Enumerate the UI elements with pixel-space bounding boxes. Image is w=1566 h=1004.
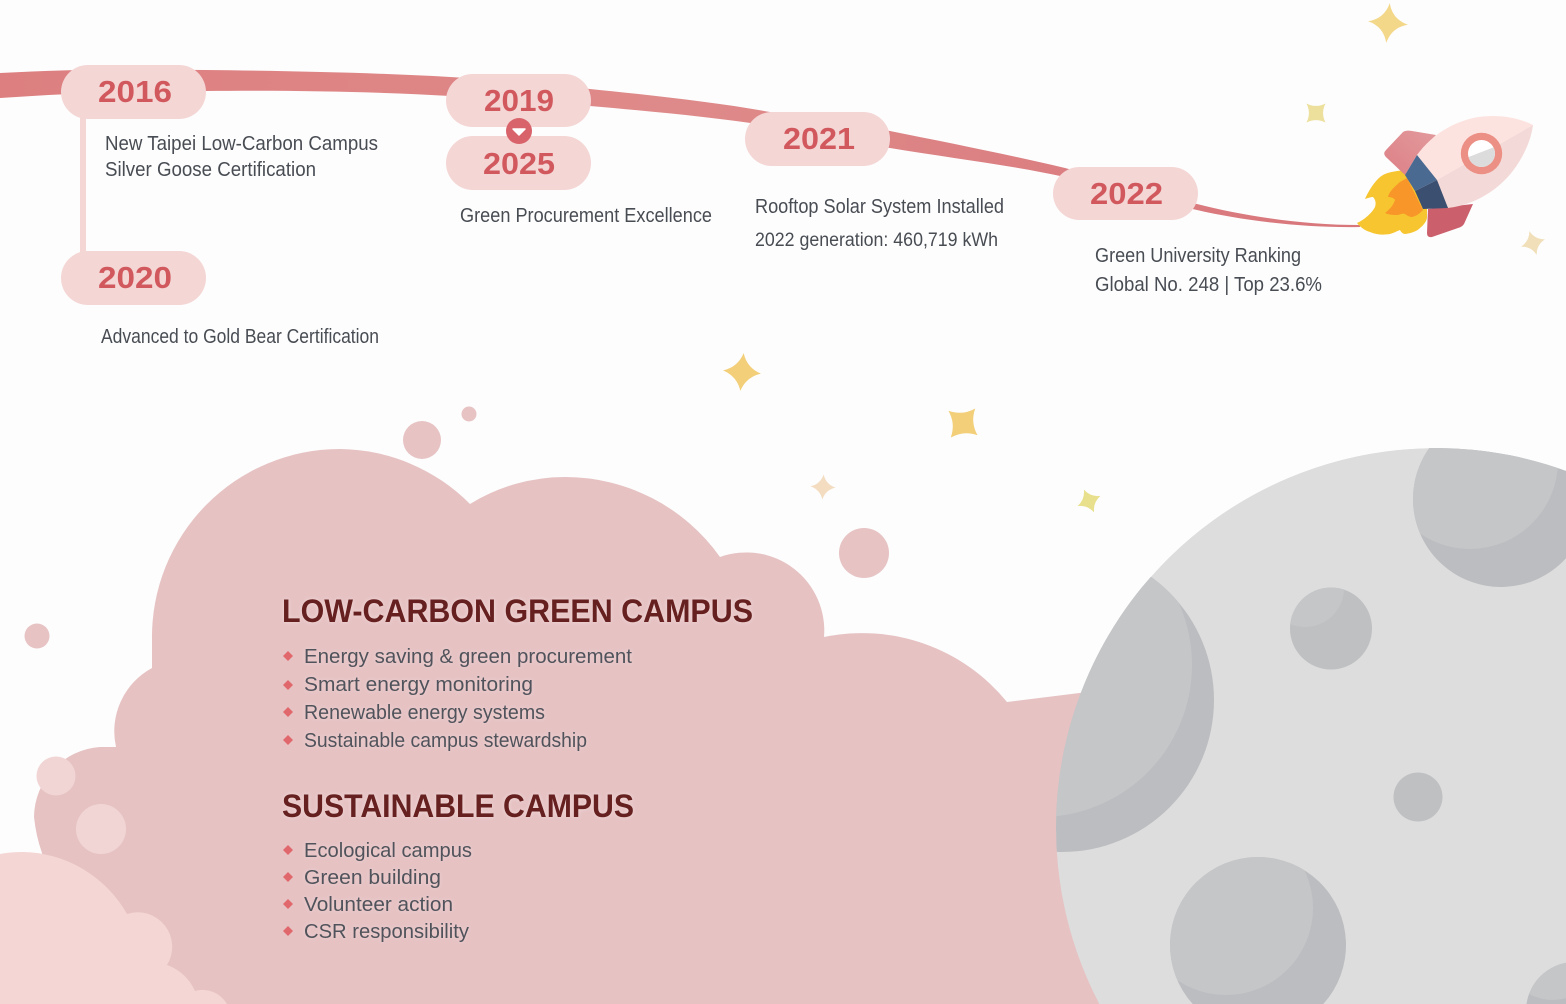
rocket band upper	[1405, 155, 1437, 191]
bubbles above cloud	[24, 406, 889, 648]
text: 2022 description	[1095, 245, 1322, 296]
rocket window	[1461, 133, 1502, 175]
moon with craters	[1056, 448, 1566, 1004]
rocket body lower	[1430, 125, 1533, 208]
crater: large left	[1056, 576, 1214, 852]
list: low-carbon items: Energy saving & green procurement	[304, 645, 632, 668]
milestone: 2025: 2025	[483, 146, 555, 181]
milestone: 2022: 2022	[1090, 176, 1163, 211]
rocket flame inner	[1385, 178, 1423, 217]
star: center	[721, 351, 763, 393]
milestone: 2020: 2020	[98, 260, 172, 295]
crater: small	[1394, 772, 1442, 822]
main pink cloud	[34, 449, 1200, 1004]
star: center right	[936, 396, 990, 450]
star: below rocket	[1517, 227, 1549, 259]
text: 2021 description: 2022 generation: 460,719 kWh	[755, 230, 998, 251]
rocket upper fin	[1384, 131, 1436, 175]
text: 2016 description	[105, 133, 378, 181]
milestone: 2025	[446, 136, 591, 190]
text: 2022 description: Green University Ranking	[1095, 245, 1301, 267]
icon: chevron connector	[506, 118, 532, 144]
crater: middle	[1290, 588, 1372, 670]
list: sustainable items	[283, 839, 472, 943]
list: sustainable items: Ecological campus	[304, 839, 472, 862]
crater: top right	[1413, 448, 1566, 587]
milestone: 2021: 2021	[783, 121, 855, 156]
star: small by rocket	[1297, 94, 1335, 132]
pale foreground cloud	[0, 852, 227, 1004]
list: sustainable items: Volunteer action	[304, 893, 453, 916]
milestone: 2021	[745, 112, 890, 166]
icon: rocket	[1357, 116, 1533, 237]
connector line 2016 to 2020	[80, 115, 86, 253]
text: 2022 description: Global No. 248 | Top 23.6%	[1095, 274, 1322, 296]
rocket band lower	[1415, 180, 1448, 209]
star: small center	[810, 474, 836, 500]
milestone: 2016	[61, 65, 206, 119]
text: 2019-2025 description: Green Procurement Excellence	[460, 205, 712, 227]
text: 2016 description: Silver Goose Certification	[105, 159, 316, 181]
list: sustainable items: Green building	[304, 866, 441, 889]
rocket flame outer	[1357, 170, 1427, 235]
milestone: 2019	[446, 74, 591, 127]
milestone: 2016: 2016	[98, 74, 172, 109]
list: low-carbon items: Smart energy monitoring	[304, 673, 533, 696]
milestone: 2020	[61, 251, 206, 305]
timeline ribbon	[0, 69, 1360, 227]
crater: bottom right	[1526, 963, 1566, 1004]
text: 2016 description: New Taipei Low-Carbon Campus	[105, 133, 378, 155]
crater: bottom	[1170, 857, 1346, 1004]
star: near moon	[1072, 484, 1106, 518]
pale bubbles on cloud	[36, 756, 126, 854]
text: 2021 description	[755, 196, 1004, 251]
panel: campus text	[282, 593, 753, 943]
list: low-carbon items: Sustainable campus stewardship	[304, 729, 587, 752]
list: low-carbon items: Renewable energy systems	[304, 701, 545, 724]
milestone: 2019: 2019	[484, 83, 554, 118]
star: top right	[1366, 1, 1410, 45]
rocket body upper	[1417, 116, 1533, 180]
rocket lower fin	[1427, 204, 1473, 237]
milestone: 2022	[1053, 167, 1198, 220]
heading: low-carbon green campus: LOW-CARBON GREEN CAMPUS	[282, 593, 753, 629]
heading: sustainable campus: SUSTAINABLE CAMPUS	[282, 788, 634, 824]
list: sustainable items: CSR responsibility	[304, 920, 470, 943]
text: 2021 description: Rooftop Solar System Installed	[755, 196, 1004, 218]
text: 2020 description: Advanced to Gold Bear Certification	[101, 326, 379, 348]
list: low-carbon items	[283, 645, 632, 752]
